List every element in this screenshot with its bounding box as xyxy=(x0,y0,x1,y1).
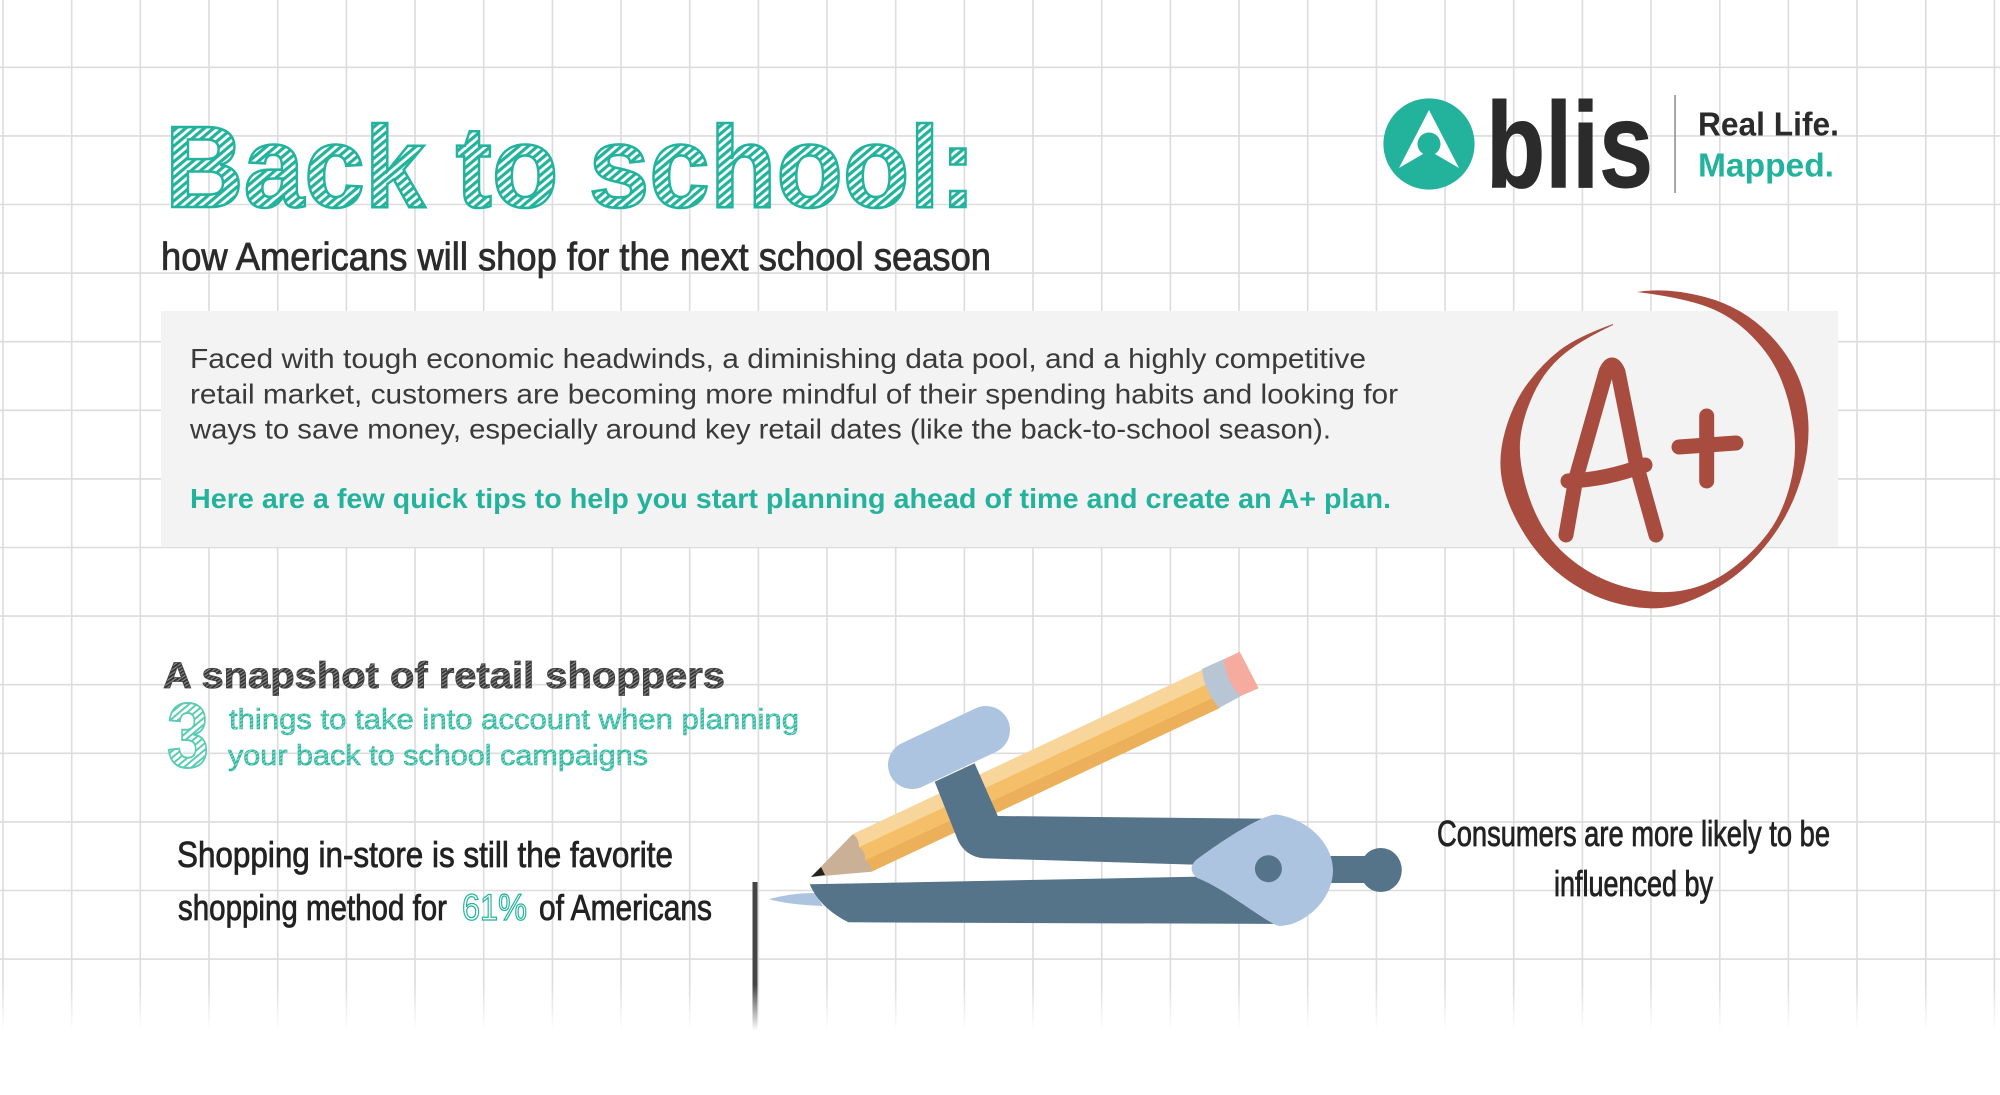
compass needle xyxy=(769,893,823,906)
statistic 61%: 61% xyxy=(462,887,527,928)
text: in-store statistic: shopping method for xyxy=(178,887,447,928)
text: consumers influenced by xyxy=(1437,813,1830,904)
heading: snapshot of retail shoppers: A snapshot of retail shoppers xyxy=(163,655,725,696)
text: consumers influenced by: influenced by xyxy=(1554,863,1713,904)
compass upper arm xyxy=(935,763,1290,866)
bottom fade xyxy=(0,985,2000,1095)
drawn compass line xyxy=(752,882,758,1032)
panel: introduction xyxy=(161,311,1838,547)
pencil xyxy=(811,652,1259,877)
intro paragraph xyxy=(189,343,1398,444)
compass pencil clamp xyxy=(912,730,986,765)
logo: blis xyxy=(1383,77,1839,213)
call to action: Here are a few quick tips to help you start planning ahead of time and create an A+ plan. xyxy=(190,483,1391,514)
text: things to take into account xyxy=(228,704,799,772)
text: things to take into account: things to take into account when planning xyxy=(229,704,799,736)
compass hinge xyxy=(1192,815,1333,926)
letter A and plus xyxy=(1566,365,1736,535)
panel background xyxy=(161,311,1838,547)
logo divider xyxy=(1674,95,1676,193)
icon: pencil and compass xyxy=(769,652,1402,926)
icon: blis location pin xyxy=(1383,98,1475,190)
text: in-store statistic: of Americans xyxy=(539,887,712,928)
title: Back to school: xyxy=(165,102,976,232)
subtitle: how Americans will shop for the next school season xyxy=(161,236,991,279)
hand drawn circle xyxy=(1500,290,1809,608)
wordmark: blis xyxy=(1486,77,1653,213)
intro paragraph: retail market, customers are becoming more mindful of their spending habits and looking for xyxy=(190,378,1398,410)
text: things to take into account: your back to school campaigns xyxy=(228,740,648,772)
text: in-store statistic xyxy=(177,834,712,928)
text: consumers influenced by: Consumers are more likely to be xyxy=(1437,813,1830,854)
text: in-store statistic: Shopping in-store is still the favorite xyxy=(177,834,673,875)
intro paragraph: Faced with tough economic headwinds, a diminishing data pool, and a highly competitive xyxy=(190,343,1366,374)
intro paragraph: ways to save money, especially around key retail dates (like the back-to-school season). xyxy=(189,414,1331,444)
compass lower arm xyxy=(810,876,1290,924)
compass handle xyxy=(1325,848,1402,892)
tagline: mapped: Mapped. xyxy=(1698,146,1834,184)
numeral 3: 3 xyxy=(167,685,209,787)
tagline: real life: Real Life. xyxy=(1698,106,1839,142)
compass pivot xyxy=(1255,855,1282,882)
icon: A+ grade xyxy=(1500,290,1809,608)
